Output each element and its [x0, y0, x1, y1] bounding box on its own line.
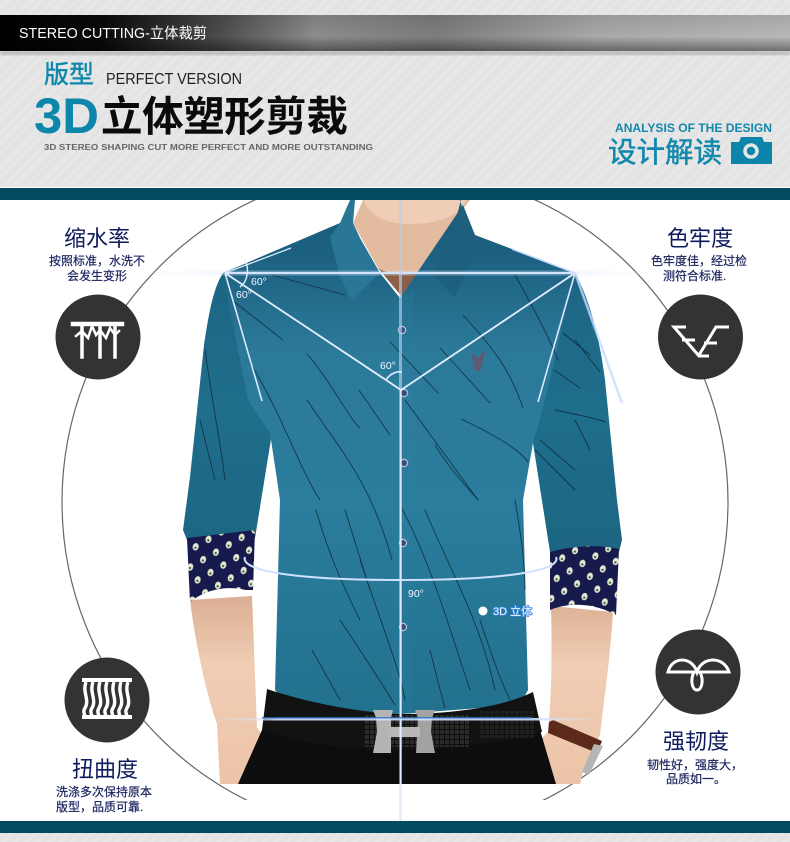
text: colour fastness description: [651, 253, 747, 283]
feature: shrinkage: [49, 226, 145, 380]
shirt body: [223, 205, 575, 714]
icon: camera: [731, 137, 772, 164]
angle labels: 90°: [408, 588, 424, 600]
3D label: [478, 604, 532, 618]
belt: [262, 689, 542, 750]
placket: [391, 290, 414, 720]
text: distortion description: 洗涤多次保持原本: [56, 784, 152, 799]
heading: colour fastness: 色牢度: [667, 226, 733, 251]
heading: shrinkage: 缩水率: [64, 226, 130, 251]
design analysis label: 设计解读: [608, 137, 722, 169]
top divider band: [0, 188, 790, 200]
belt buckle: [373, 710, 435, 753]
feature: colour fastness: [651, 226, 747, 380]
text: distortion description: [56, 784, 152, 814]
icon: distortion: [64, 658, 150, 742]
design analysis label: [608, 121, 772, 169]
header panel: [0, 0, 790, 188]
left sleeve: [183, 273, 290, 540]
icon: shrinkage: [56, 294, 140, 380]
footer strip: [0, 833, 790, 842]
face and neck: [353, 200, 470, 298]
heading: 3D main title: [34, 88, 348, 144]
feature: toughness: [647, 630, 743, 786]
arm: right forearm and hand: [535, 606, 613, 784]
bottom divider band: [0, 821, 790, 833]
text: shrinkage description: [49, 254, 145, 283]
logo: rabbit: [472, 352, 485, 371]
text: distortion description: 版型，品质可靠.: [56, 800, 143, 814]
bar title: STEREO CUTTING-立体裁剪: [19, 25, 207, 42]
text: toughness description: [647, 757, 743, 786]
angle labels: [236, 276, 424, 600]
icon: toughness: [656, 630, 740, 714]
angle labels: 60°: [251, 276, 267, 288]
subheading: 3D STEREO SHAPING CUT MORE PERFECT AND MORE OUTSTANDING: [44, 143, 373, 152]
heading: 3D main title: 3D: [34, 88, 99, 144]
right sleeve: [510, 273, 622, 552]
angle labels: 60°: [236, 289, 252, 301]
icon: colour fastness: [658, 294, 743, 380]
heading: 3D main title: 立体塑形剪裁: [101, 93, 348, 140]
feature: distortion: [56, 658, 152, 814]
text: colour fastness description: 色牢度佳，经过检: [651, 253, 747, 268]
heading: toughness: 强韧度: [663, 729, 729, 754]
text: shrinkage description: 会发生变形: [67, 268, 127, 283]
illustration: shirt model: [183, 200, 622, 784]
heading: perfect version: PERFECT VERSION: [106, 71, 242, 88]
3D label: 3D 立体: [493, 604, 532, 618]
text: colour fastness description: 测符合标准.: [663, 268, 726, 283]
3D measuring overlay: [150, 200, 645, 821]
buttons: [398, 326, 408, 631]
right cuff: [550, 546, 619, 615]
heading: 版型: 版型: [44, 61, 94, 89]
arm: left forearm and hand: [190, 596, 265, 784]
collar: [330, 200, 380, 300]
wristwatch: [548, 720, 603, 775]
text: toughness description: 韧性好，强度大，: [647, 757, 743, 772]
text: shrinkage description: 按照标准，水洗不: [49, 254, 145, 268]
left cuff: [187, 530, 255, 602]
trousers: [238, 730, 556, 784]
large circle outline: [62, 169, 728, 835]
shirt print: diagonal dashes: [200, 275, 605, 708]
angle labels: 60°: [380, 360, 396, 372]
text: toughness description: 品质如一。: [666, 771, 726, 786]
heading: distortion: 扭曲度: [72, 757, 138, 782]
design analysis label: ANALYSIS OF THE DESIGN: [615, 121, 772, 135]
